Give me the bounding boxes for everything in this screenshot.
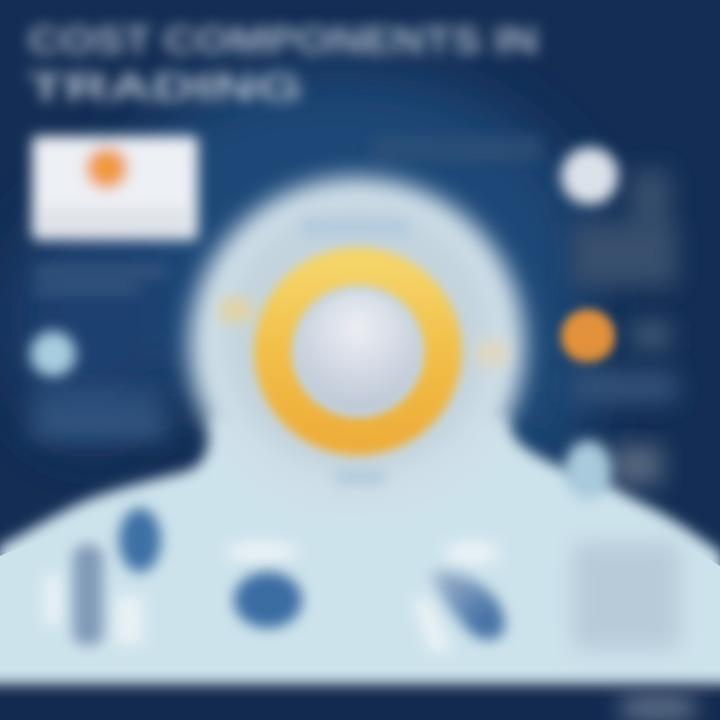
helmet inner tone (222, 203, 492, 473)
icon: blue figure left (73, 508, 161, 645)
chart: yellow donut ring (273, 266, 443, 436)
panel: top left card (32, 136, 198, 240)
small label right shoulder (612, 445, 662, 485)
panel: lower right pale panel (572, 542, 680, 650)
title (28, 20, 538, 109)
subtitle top right (372, 136, 542, 162)
background glow (10, 70, 590, 480)
icon: pale blue circle left (30, 331, 76, 377)
icon: white circle right (561, 147, 619, 205)
central sphere (298, 292, 418, 412)
icon: blue shape right of centre (430, 572, 505, 640)
text block: below card (34, 266, 166, 294)
icon: orange circle (86, 147, 128, 189)
title: COST COMPONENTS IN (28, 20, 538, 62)
text block: lower right (572, 322, 677, 402)
title: TRADING (28, 67, 303, 109)
device right shoulder (564, 440, 612, 500)
icon: orange circle right (561, 309, 615, 363)
panel: lower body highlights (44, 541, 500, 652)
footer base fill (0, 698, 720, 720)
text block: left (32, 392, 167, 438)
helmet outer ring (189, 177, 525, 513)
astronaut body (0, 415, 720, 720)
body base fill (0, 535, 720, 720)
footer band (0, 684, 720, 720)
helmet labels (220, 218, 508, 484)
text block: upper right (572, 170, 677, 287)
footer right note (622, 696, 694, 720)
icon: blue oval centre (234, 572, 302, 628)
